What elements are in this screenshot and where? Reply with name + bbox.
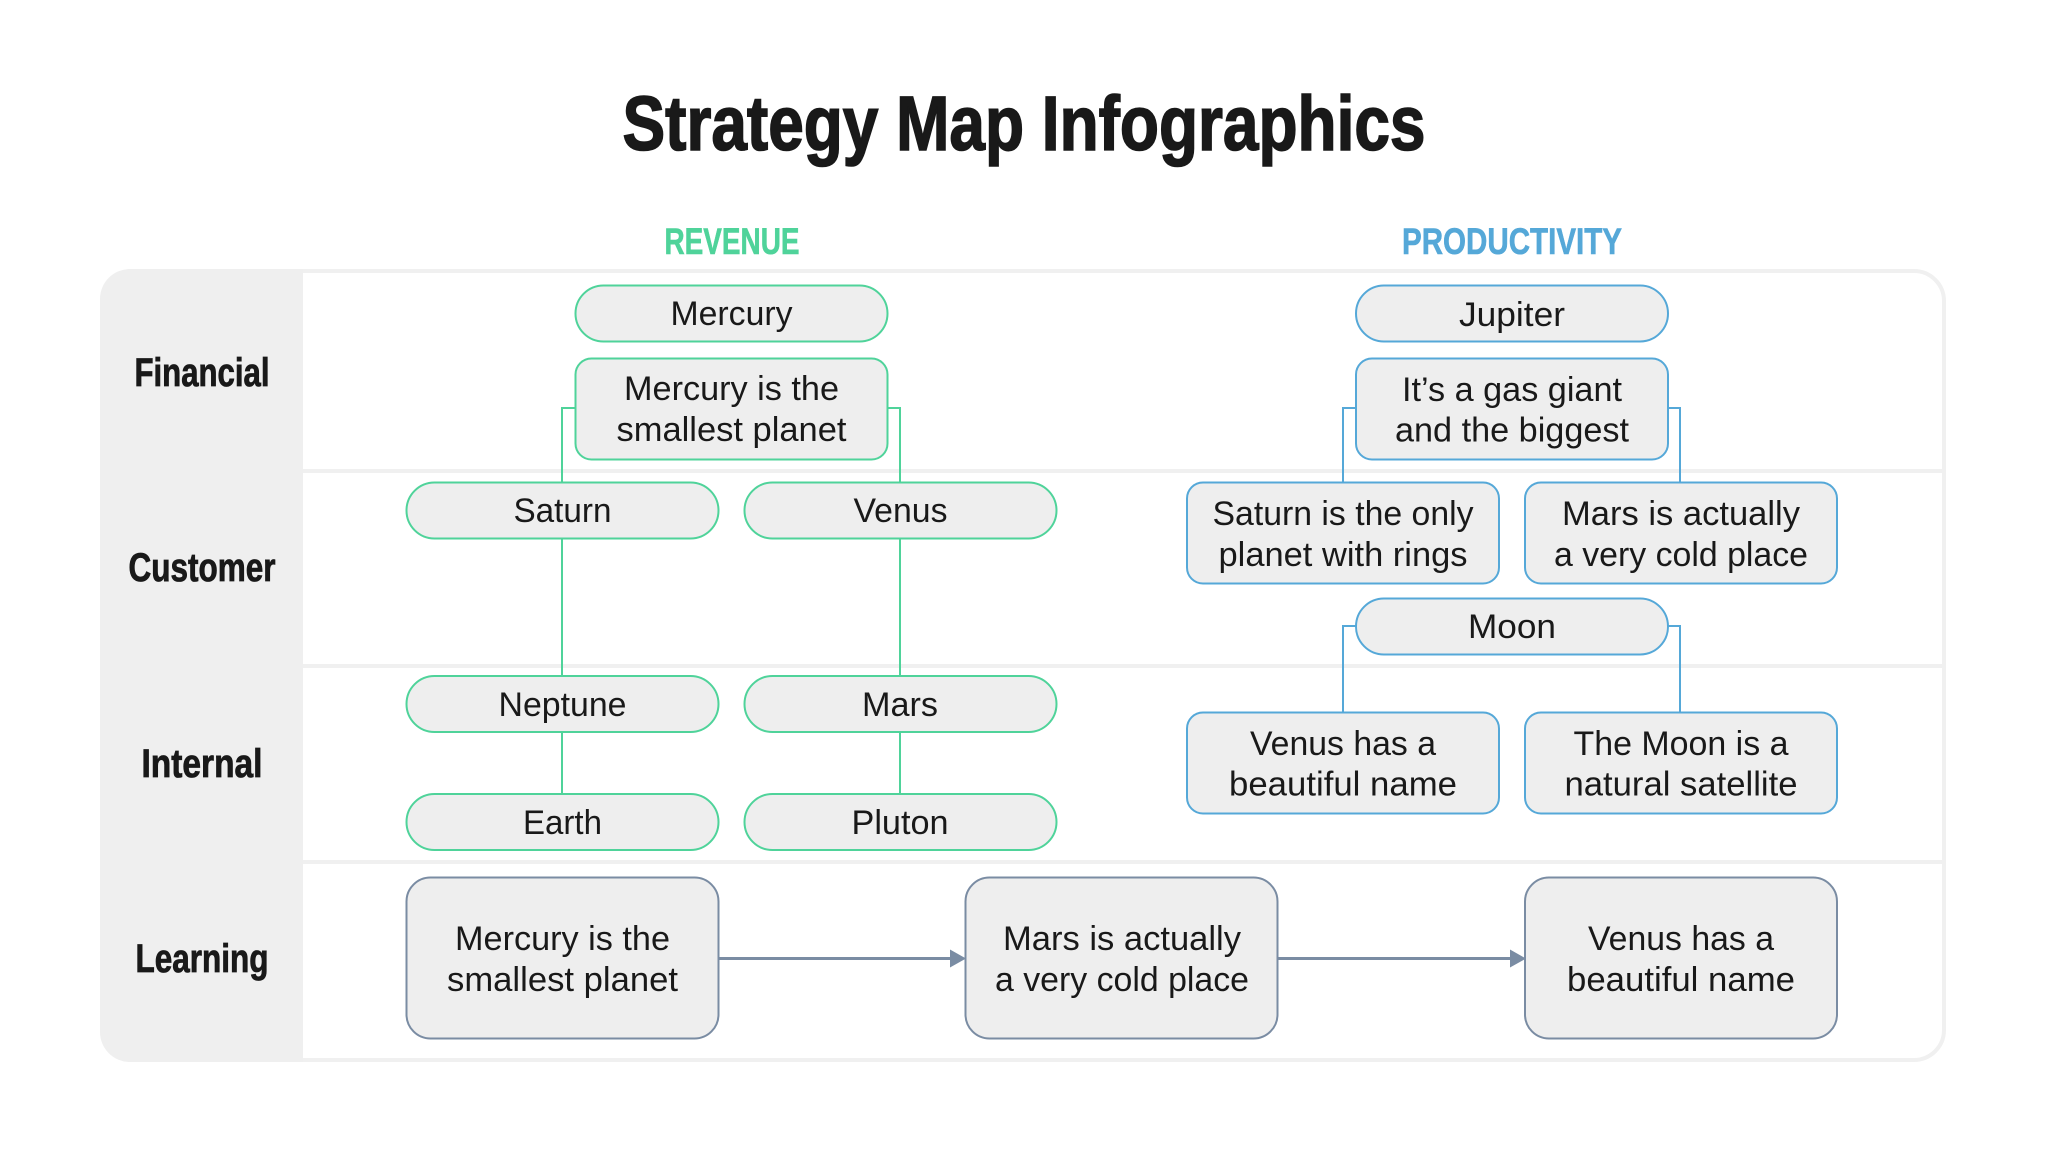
node: Saturn description: planet with rings xyxy=(1218,536,1468,574)
node: Mars: Mars xyxy=(862,686,938,724)
arrow: learning second to third xyxy=(1278,950,1526,968)
node: Jupiter xyxy=(1356,286,1668,342)
connectors: revenue xyxy=(562,408,900,794)
node: Mars description xyxy=(1525,482,1837,584)
node: Neptune xyxy=(406,676,718,732)
node: Moon description xyxy=(1525,712,1837,814)
panel: strategy map grid xyxy=(100,269,1944,1062)
node: Mars xyxy=(744,676,1056,732)
learning box: Venus: Venus has a xyxy=(1588,920,1774,958)
node: Mars description: a very cold place xyxy=(1554,536,1808,574)
node: Moon description: natural satellite xyxy=(1564,766,1798,804)
learning box: Venus: beautiful name xyxy=(1567,961,1795,999)
node: Jupiter description: and the biggest xyxy=(1395,412,1630,450)
node: Venus: Venus xyxy=(854,492,948,530)
node: Earth xyxy=(406,794,718,850)
node: Moon description: The Moon is a xyxy=(1574,725,1789,763)
arrow: learning first to second xyxy=(718,950,966,968)
node: Jupiter description xyxy=(1356,358,1668,460)
row label: customer: Customer xyxy=(128,546,276,590)
connectors: productivity xyxy=(1343,408,1680,712)
node: Venus description: beautiful name xyxy=(1229,766,1457,804)
node: Mercury description xyxy=(576,358,888,460)
node: Pluton: Pluton xyxy=(852,804,948,842)
node: Moon: Moon xyxy=(1468,608,1556,646)
learning box: Venus xyxy=(1525,878,1837,1038)
learning box: Mercury: Mercury is the xyxy=(455,920,670,958)
node: Neptune: Neptune xyxy=(498,686,626,724)
row label: financial: Financial xyxy=(134,351,270,395)
node: Mercury xyxy=(576,286,888,342)
row label: internal: Internal xyxy=(142,742,262,786)
node: Moon xyxy=(1356,598,1668,654)
heading: productivity: PRODUCTIVITY xyxy=(1402,221,1622,262)
node: Earth: Earth xyxy=(523,804,602,842)
node: Venus description xyxy=(1187,712,1499,814)
row label: learning: Learning xyxy=(136,937,268,981)
node: Mercury: Mercury xyxy=(670,295,792,333)
node: Mars description: Mars is actually xyxy=(1562,495,1800,533)
node: Saturn description xyxy=(1187,482,1499,584)
node: Mercury description: smallest planet xyxy=(616,411,847,449)
title: Strategy Map Infographics xyxy=(622,81,1426,167)
node: Saturn: Saturn xyxy=(514,492,612,530)
node: Jupiter description: It’s a gas giant xyxy=(1402,371,1623,409)
learning box: Mars: a very cold place xyxy=(995,961,1249,999)
node: Pluton xyxy=(744,794,1056,850)
panel frame xyxy=(102,271,1944,1060)
label column xyxy=(100,269,303,1062)
heading: revenue: REVENUE xyxy=(664,221,800,262)
node: Venus xyxy=(744,482,1056,538)
node: Jupiter: Jupiter xyxy=(1459,296,1565,334)
learning box: Mercury: smallest planet xyxy=(447,961,679,999)
learning box: Mars xyxy=(966,878,1278,1038)
learning box: Mercury xyxy=(406,878,718,1038)
learning box: Mars: Mars is actually xyxy=(1003,920,1241,958)
node: Venus description: Venus has a xyxy=(1250,725,1436,763)
node: Saturn xyxy=(406,482,718,538)
node: Mercury description: Mercury is the xyxy=(624,370,839,408)
node: Saturn description: Saturn is the only xyxy=(1212,495,1474,533)
